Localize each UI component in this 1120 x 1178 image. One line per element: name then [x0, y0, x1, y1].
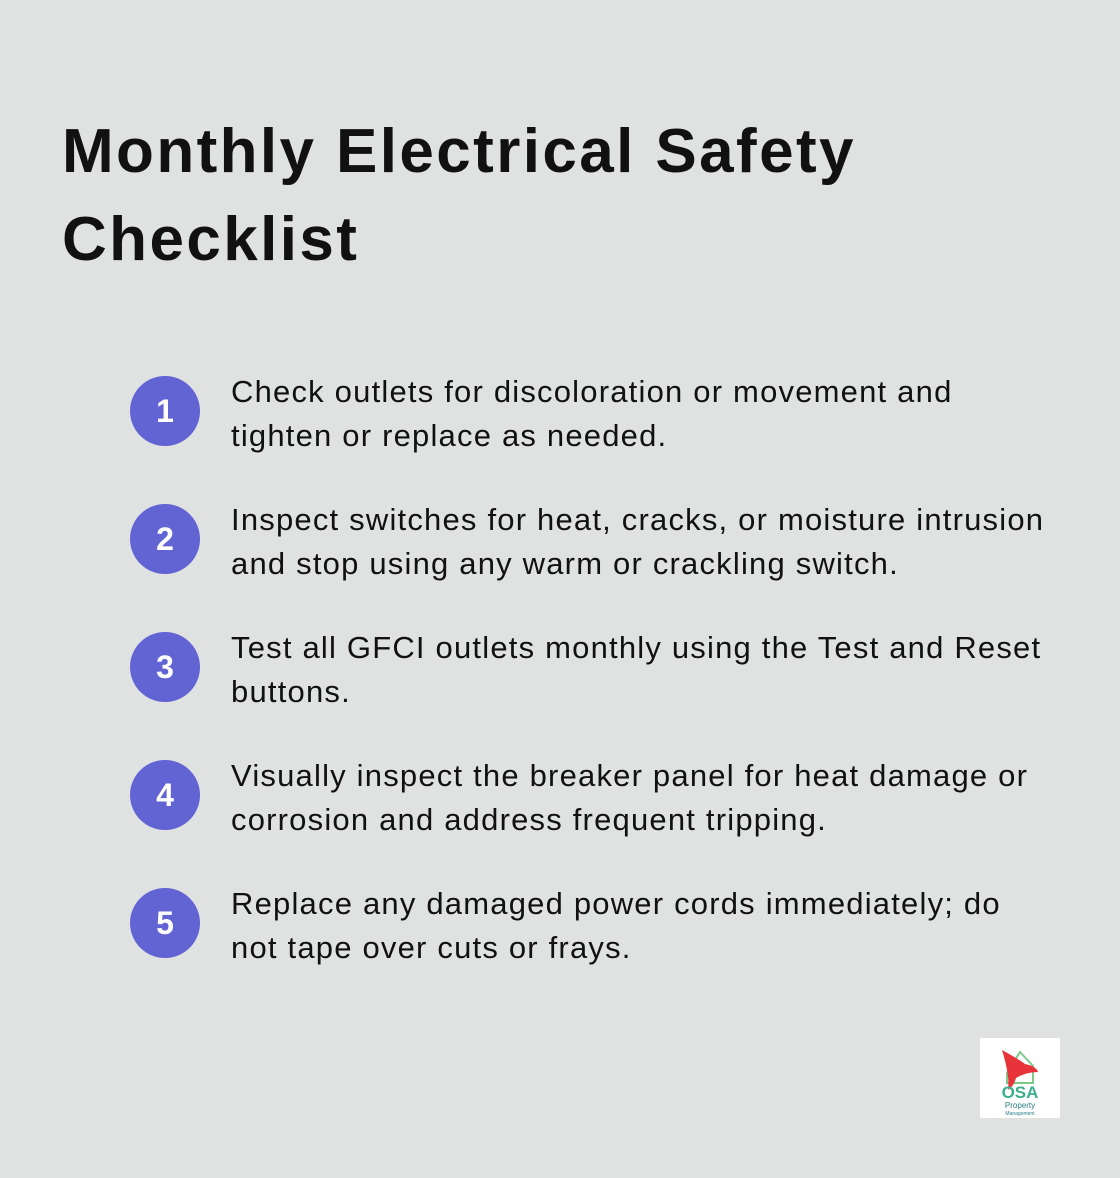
item 2: 2 [156, 521, 174, 557]
title: Checklist [62, 205, 359, 274]
item 5: 5 [156, 905, 174, 941]
item 4: corrosion and address frequent tripping. [231, 802, 827, 837]
logo [980, 1038, 1060, 1118]
item 1: Check outlets for discoloration or movement and [231, 374, 953, 409]
item 3 [130, 630, 1041, 709]
item 4 [130, 758, 1028, 837]
item 1 [130, 374, 953, 453]
logo: Management [1005, 1111, 1035, 1117]
item 3: 3 [156, 649, 174, 685]
item 4: 4 [156, 777, 174, 813]
item 3: Test all GFCI outlets monthly using the Test and Reset [231, 630, 1041, 665]
title [62, 117, 856, 274]
logo: Property [1005, 1101, 1035, 1110]
title: Monthly Electrical Safety [62, 117, 856, 186]
item 1: tighten or replace as needed. [231, 418, 667, 453]
item 2: Inspect switches for heat, cracks, or moisture intrusion [231, 502, 1044, 537]
item 5 [130, 886, 1001, 965]
item 4: Visually inspect the breaker panel for heat damage or [231, 758, 1028, 793]
logo: OSA [1002, 1083, 1038, 1102]
item 3: buttons. [231, 674, 351, 709]
item 2: and stop using any warm or crackling switch. [231, 546, 899, 581]
item 2 [130, 502, 1044, 581]
item 1: 1 [156, 393, 174, 429]
item 5: Replace any damaged power cords immediately; do [231, 886, 1001, 921]
item 5: not tape over cuts or frays. [231, 930, 632, 965]
